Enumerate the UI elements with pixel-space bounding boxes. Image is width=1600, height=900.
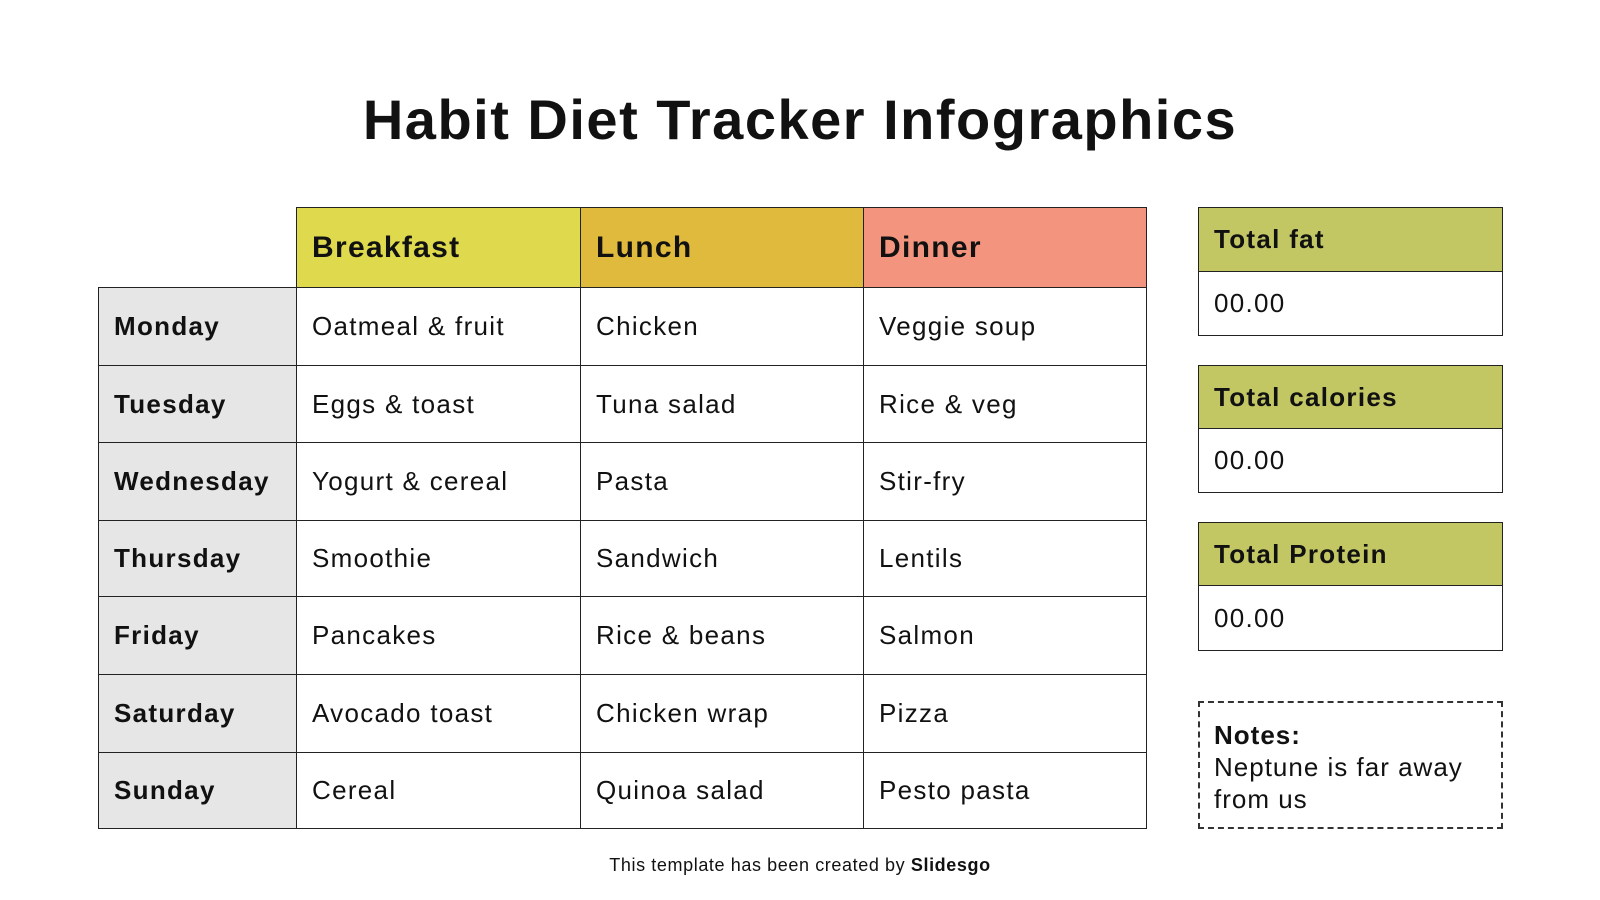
row: Tuesday: Rice & veg: [879, 388, 1018, 418]
row: Friday: Salmon: [879, 620, 975, 650]
row: Friday: Rice & beans: [596, 620, 766, 650]
row: Monday: Chicken: [596, 311, 699, 341]
box: total calories: [1198, 365, 1503, 493]
row: Tuesday: [98, 366, 1147, 442]
notes box: Neptune is far away from us: [1214, 752, 1463, 814]
row: Saturday: [98, 675, 1147, 752]
row: Saturday: Avocado toast: [312, 698, 493, 728]
row: Friday: [98, 597, 1147, 674]
row: Monday: Monday: [114, 311, 220, 341]
row: Saturday: Chicken wrap: [596, 698, 769, 728]
header: breakfast: Breakfast: [312, 230, 460, 264]
row: Sunday: Quinoa salad: [596, 775, 765, 805]
row: Saturday: Pizza: [879, 698, 949, 728]
table: [98, 207, 1147, 829]
row: Sunday: Sunday: [114, 775, 216, 805]
row: Wednesday: Wednesday: [114, 466, 270, 496]
header: dinner: [863, 207, 1147, 288]
box: total fat: [1198, 207, 1503, 336]
row: Thursday: Sandwich: [596, 543, 719, 573]
row: Monday: Oatmeal & fruit: [312, 311, 505, 341]
box: total fat: 00.00: [1214, 288, 1286, 318]
row: Wednesday: Stir-fry: [879, 466, 966, 496]
notes box: Notes:: [1214, 720, 1301, 750]
row: Wednesday: [98, 443, 1147, 520]
row: Friday: Friday: [114, 620, 200, 650]
row: Tuesday: Tuna salad: [596, 388, 737, 418]
row: Saturday: Saturday: [114, 698, 236, 728]
row: Sunday: Pesto pasta: [879, 775, 1031, 805]
row: Sunday: Cereal: [312, 775, 396, 805]
header: lunch: [580, 207, 864, 288]
row: Friday: Pancakes: [312, 620, 437, 650]
box: total protein: 00.00: [1214, 602, 1286, 632]
row: Sunday: [98, 753, 1147, 829]
row: Thursday: [98, 521, 1147, 596]
box: total protein: Total Protein: [1214, 538, 1388, 568]
row: Tuesday: Eggs & toast: [312, 388, 475, 418]
notes box: [1198, 701, 1503, 829]
row: Thursday: Smoothie: [312, 543, 432, 573]
row: Thursday: Lentils: [879, 543, 963, 573]
row: Wednesday: Yogurt & cereal: [312, 466, 508, 496]
header: breakfast: [296, 207, 581, 288]
box: total calories: Total calories: [1214, 382, 1398, 412]
box: total fat: Total fat: [1214, 224, 1325, 254]
header: lunch: Lunch: [596, 230, 692, 264]
header: dinner: Dinner: [879, 230, 982, 264]
box: total protein: [1198, 522, 1503, 651]
title: Habit Diet Tracker Infographics: [363, 88, 1237, 151]
box: total calories: 00.00: [1214, 445, 1286, 475]
row: Tuesday: Tuesday: [114, 388, 227, 418]
row: Wednesday: Pasta: [596, 466, 669, 496]
row: Monday: Veggie soup: [879, 311, 1036, 341]
row: Thursday: Thursday: [114, 543, 241, 573]
footer: This template has been created by Slidesgo: [609, 855, 991, 875]
row: Monday: [98, 287, 1147, 365]
